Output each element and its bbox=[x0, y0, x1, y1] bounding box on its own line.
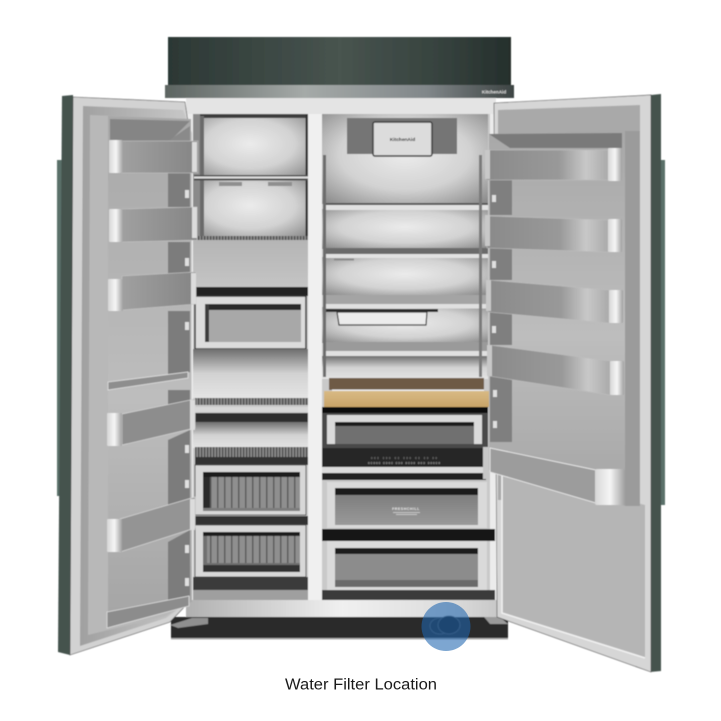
cavity 3 bbox=[322, 257, 488, 295]
panel: left freezer compartment bbox=[193, 114, 308, 600]
cabinet frame bbox=[186, 98, 498, 620]
door bin 1 bbox=[485, 148, 622, 181]
door top recess bbox=[110, 119, 190, 141]
door frame bbox=[494, 95, 651, 672]
panel: left door bbox=[57, 95, 198, 655]
cavity 5 bbox=[322, 356, 488, 379]
wire shelf 1 bbox=[194, 236, 308, 240]
door bin 4 bbox=[107, 399, 195, 446]
mid cavity bbox=[193, 349, 308, 398]
toe kick bbox=[170, 617, 508, 640]
door bin 5 bbox=[483, 447, 625, 505]
drawer B FreshChill: FRESHCHILL bbox=[392, 507, 420, 511]
outer skin bbox=[58, 95, 76, 655]
upper shelf bbox=[194, 175, 308, 186]
ice module bbox=[347, 118, 457, 156]
brand band bbox=[165, 85, 514, 98]
drawer 2 bbox=[193, 465, 308, 525]
shelf 4 bbox=[324, 342, 488, 356]
drawer C bbox=[322, 541, 495, 600]
side strip bbox=[661, 160, 665, 505]
door bin 2 bbox=[485, 215, 622, 252]
bin column bbox=[489, 130, 640, 506]
door bin 3 bbox=[486, 280, 623, 323]
refrigerator illustration bbox=[57, 37, 665, 672]
lower door panel bbox=[502, 470, 645, 658]
panel: right door bbox=[483, 94, 665, 672]
upper door liner bbox=[498, 105, 640, 500]
lower door panel edge bbox=[502, 470, 645, 658]
lower cavity bbox=[193, 422, 308, 448]
side rails bbox=[323, 155, 482, 377]
water filter cap bbox=[430, 616, 460, 634]
solid panel bbox=[193, 240, 308, 287]
door frame bbox=[70, 97, 191, 655]
door brackets bbox=[168, 126, 190, 604]
door top recess bbox=[489, 133, 622, 148]
upper freezer cavity bbox=[193, 114, 308, 238]
wire shelf 2 bbox=[195, 398, 308, 422]
control panel: 000 000 00 000 00 00 00 bbox=[371, 456, 438, 460]
door liner bbox=[80, 106, 192, 646]
bin column bbox=[108, 116, 192, 628]
outer skin bbox=[650, 94, 661, 672]
shelf 2 bbox=[324, 248, 488, 260]
caption: Water Filter Location bbox=[285, 676, 437, 694]
upper fridge cavity bbox=[322, 114, 488, 204]
door bin 4 bbox=[487, 345, 624, 395]
cavity 4 bbox=[322, 307, 488, 343]
drawer B FreshChill bbox=[322, 482, 495, 541]
drawer 3 bbox=[193, 525, 308, 600]
shelf 1 bbox=[324, 203, 488, 210]
top grille panel bbox=[168, 37, 511, 86]
door rail bbox=[108, 372, 188, 390]
control panel bbox=[322, 448, 488, 480]
control panel: 00000 0000 000 0000 000 00000 bbox=[368, 461, 440, 465]
wood drawer bbox=[324, 378, 489, 407]
panel: right fridge compartment bbox=[322, 114, 495, 600]
cavity 2 bbox=[322, 209, 488, 249]
side strip bbox=[57, 160, 63, 496]
door bin 2 bbox=[109, 207, 197, 242]
drawer 1 bbox=[193, 287, 308, 349]
door bin 5 bbox=[107, 497, 195, 552]
brand band: KitchenAid bbox=[482, 90, 506, 94]
door bin 1 bbox=[109, 140, 198, 173]
door brackets bbox=[490, 180, 512, 442]
shelf 3 with slim drawer bbox=[324, 295, 488, 325]
highlight: water filter location bbox=[422, 602, 470, 651]
ice module: KitchenAid bbox=[390, 137, 415, 143]
wire shelf 3 bbox=[195, 447, 308, 465]
door bin 3 bbox=[108, 272, 196, 311]
drawer A bbox=[322, 407, 488, 448]
lower tray bbox=[107, 596, 189, 628]
